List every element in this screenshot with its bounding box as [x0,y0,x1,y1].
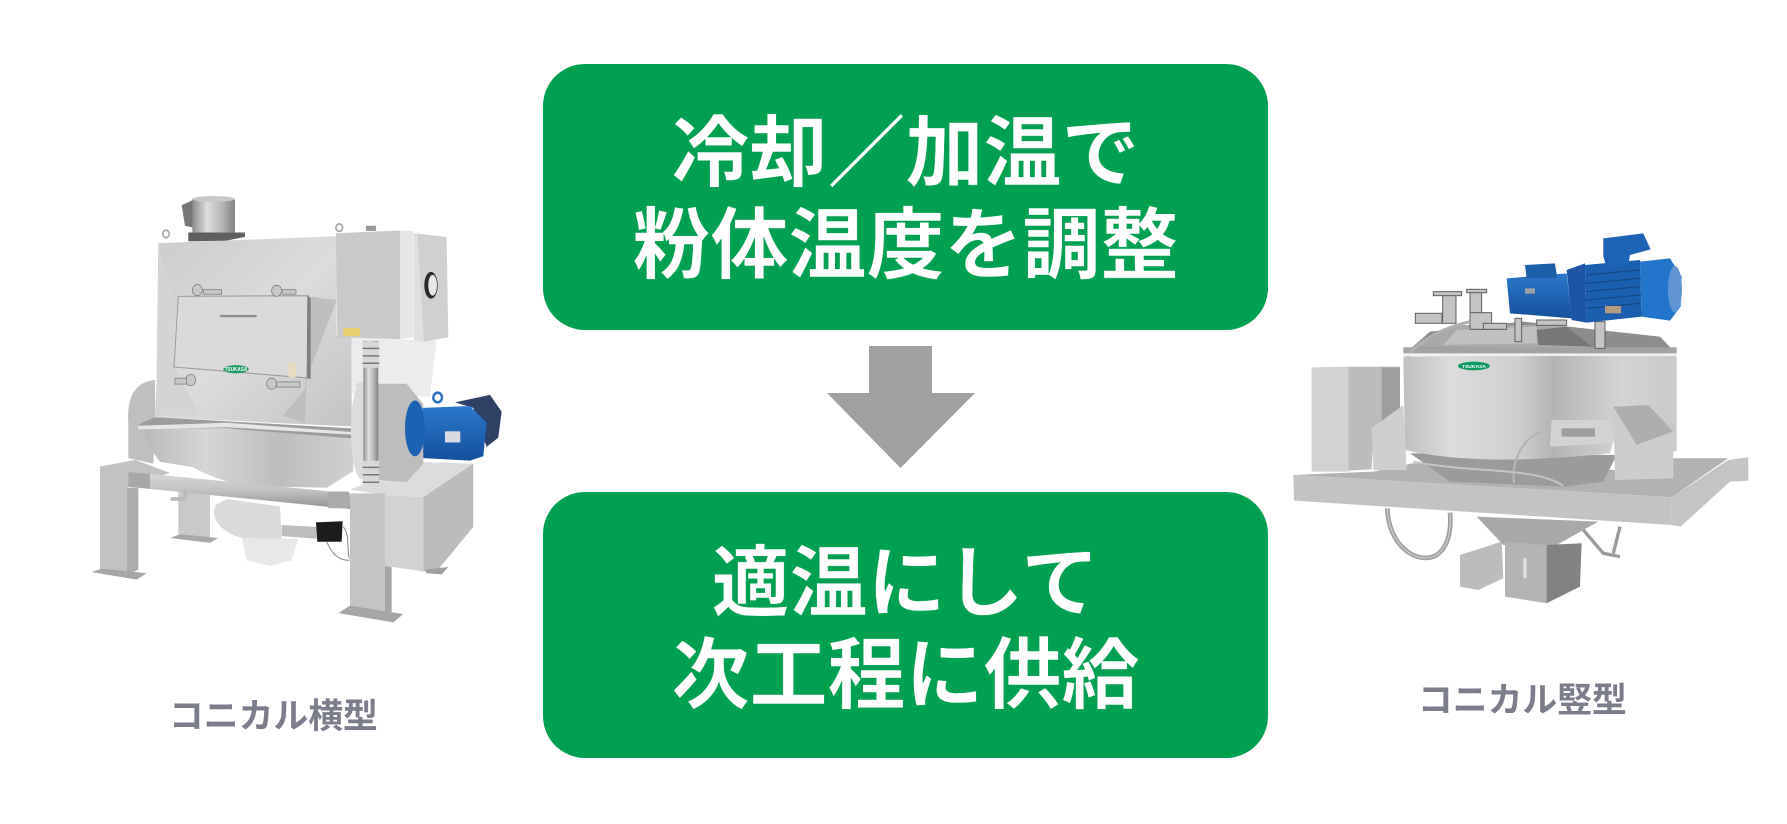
vertical pipe [363,341,378,486]
horizontal pipe [128,472,350,509]
lower cone [1477,517,1598,545]
blue motor [1507,233,1682,323]
tank body [1403,353,1677,460]
arrow: downward grey [827,346,975,468]
logo [223,365,249,373]
cone below tank [1410,453,1617,487]
back-left leg [178,490,210,538]
platform front beam [1293,475,1672,525]
hopper body [155,236,352,426]
discharge chute [214,499,282,542]
left bracket [1372,405,1407,470]
top fittings [1415,289,1605,348]
panel: bottom green box, supply to next process: 次工程に供給 [671,631,1140,719]
right leg [350,493,385,612]
right base box [350,462,473,497]
door clamps [175,284,300,389]
right cover [1613,405,1673,445]
platform top surface [1293,458,1728,497]
panel: horizontal conical machine photo: TSUKASA [225,367,248,373]
right end disc [357,384,423,482]
left cabinet [1312,367,1348,472]
trough left end [128,380,155,464]
panel: bottom green box, supply to next process: 適温にして [712,539,1099,627]
panel: vertical conical machine photo: TSUKASA [1462,364,1486,370]
tank lid [1403,322,1677,355]
panel: top green box, cooling / heating: 冷却／加温で [671,109,1140,197]
control box [336,231,413,339]
label: vertical conical: コニカル竪型 [1418,681,1627,720]
label: horizontal conical: コニカル横型 [169,697,378,736]
top cylinder [182,200,193,228]
coil hose [1387,508,1450,558]
bottom valve [1460,542,1503,590]
hose [1514,432,1542,483]
left leg [100,460,170,575]
panel: bottom green box, supply to next process [543,492,1268,758]
panel: top green box, cooling / heating: 粉体温度を調整 [632,201,1178,289]
inspection door [174,296,310,378]
panel: top green box, cooling / heating [543,64,1268,330]
motor [405,393,502,461]
inspection window [1550,420,1613,447]
trough body [143,426,353,488]
right lower column [352,337,437,397]
tank logo [1458,362,1490,370]
